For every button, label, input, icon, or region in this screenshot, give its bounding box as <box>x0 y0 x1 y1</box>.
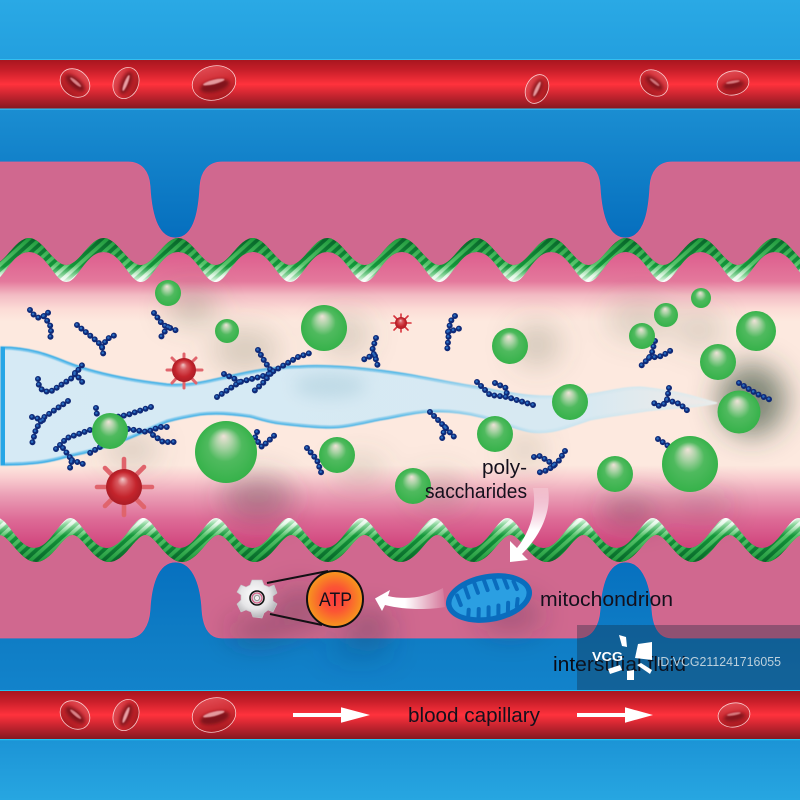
watermark banner: ID:VCG211241716055 <box>657 655 781 669</box>
arrow: blood flow left <box>293 707 370 723</box>
polysaccharide chain highlights <box>30 310 773 474</box>
green particles <box>92 280 776 504</box>
label: interstitial fluid: interstitial fluid <box>553 654 686 676</box>
mitochondrion <box>442 567 536 629</box>
belt lines between gear and ATP <box>267 571 328 625</box>
label: blood capillary: blood capillary <box>408 705 540 727</box>
red blood cells bottom vessel <box>54 693 752 737</box>
intestinal lumen channel <box>1 345 717 467</box>
label: polysaccharides: saccharides <box>425 481 527 503</box>
arrow: blood flow right <box>577 707 653 723</box>
red virus medium <box>167 354 202 388</box>
arrow: mitochondrion to ATP <box>375 588 445 611</box>
polysaccharide chains <box>30 310 773 475</box>
label: mitochondrion: mitochondrion <box>540 589 673 611</box>
upper cell cytoplasm with junction notches <box>0 162 800 265</box>
ATP and mitochondrion shadows <box>228 588 542 659</box>
lower microvilli membrane wave <box>0 518 800 562</box>
label: polysaccharides: poly- <box>482 457 527 479</box>
cell interior gradient <box>0 240 800 562</box>
watermark banner <box>577 625 800 690</box>
arrow: polysaccharides to mitochondrion <box>510 488 549 562</box>
red virus small <box>391 314 411 332</box>
label: polysaccharides <box>425 457 527 503</box>
soft shadows in the cell <box>104 292 786 524</box>
ATP circle <box>307 571 363 627</box>
upper microvilli membrane wave <box>0 238 800 282</box>
red blood cells top vessel <box>54 61 751 107</box>
top blood capillary <box>0 59 800 110</box>
ATP circle: ATP <box>319 589 352 611</box>
polysaccharide chain dot colour <box>30 310 773 475</box>
bottom blood capillary <box>0 690 800 740</box>
lower cell cytoplasm with junction notches <box>0 535 800 638</box>
watermark banner: VCG <box>592 649 623 664</box>
icon: gear <box>237 580 277 618</box>
red virus large <box>97 459 152 515</box>
